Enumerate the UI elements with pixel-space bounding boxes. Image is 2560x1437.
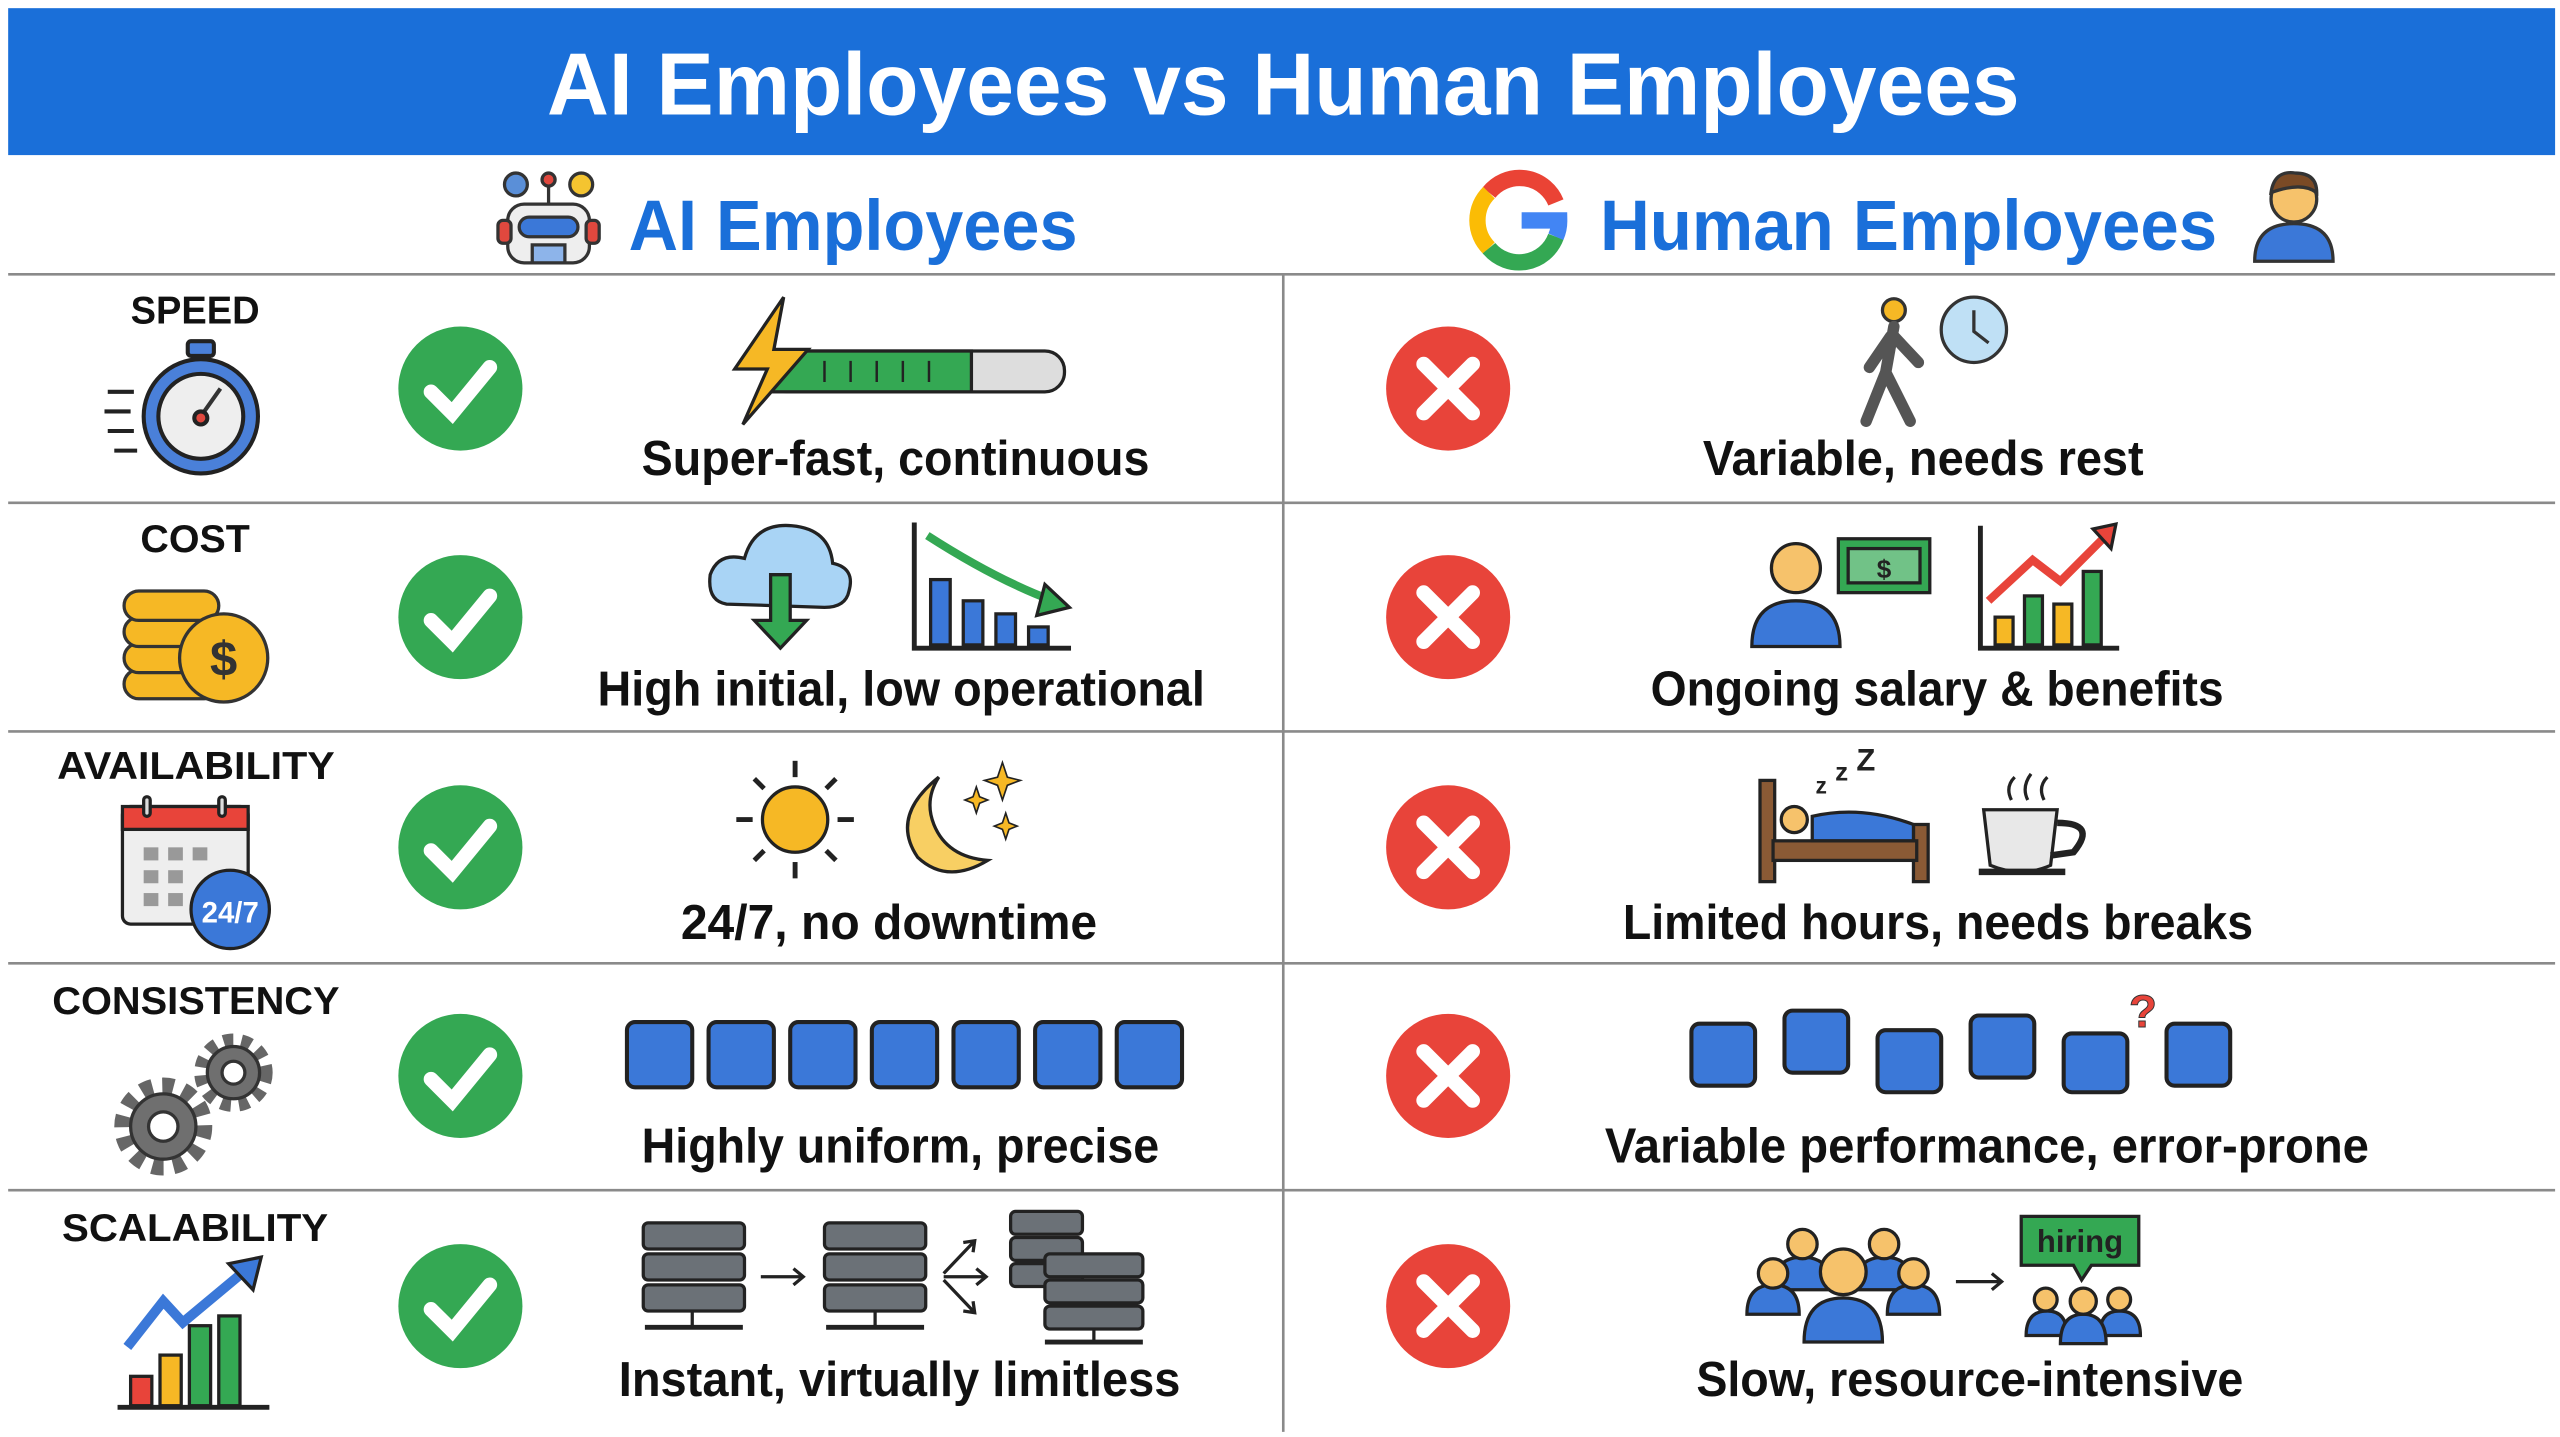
illustration: cloud and falling chart <box>710 522 1071 648</box>
row: CONSISTENCY <box>52 980 2369 1173</box>
icon: calendar 24/7: 24/7 <box>202 896 259 929</box>
check <box>398 1244 522 1368</box>
row: CONSISTENCY: Variable performance, error-prone <box>1605 1119 2369 1173</box>
illustration: sun and moon <box>736 761 1020 878</box>
illustration: uniform blocks <box>627 1022 1182 1087</box>
illustration: bolt and bar <box>735 297 1064 424</box>
column header: AI Employees: AI Employees <box>629 186 1078 266</box>
icon: robot <box>498 173 599 263</box>
label: SCALABILITY: SCALABILITY <box>62 1207 328 1250</box>
icon: gears <box>122 1040 266 1167</box>
label: AVAILABILITY: AVAILABILITY <box>57 745 335 788</box>
icon: person <box>2255 173 2333 261</box>
illustration: servers <box>643 1211 1143 1342</box>
icon: coins <box>124 591 268 702</box>
icon: coins: $ <box>210 633 237 687</box>
row: AVAILABILITY: Limited hours, needs breaks <box>1623 896 2253 950</box>
illustration: bed and coffee: z <box>1835 756 1848 786</box>
illustration: walker and clock <box>1866 297 2007 421</box>
illustration: salary and rising chart <box>1752 524 2119 648</box>
check <box>398 785 522 909</box>
row: SPEED <box>104 289 2144 486</box>
illustration: salary and rising chart: $ <box>1877 554 1892 584</box>
cross <box>1386 555 1510 679</box>
row: SCALABILITY <box>62 1207 2243 1407</box>
row: COST <box>124 518 2224 716</box>
illustration: variable blocks <box>1691 986 2230 1092</box>
column header: Human Employees: Human Employees <box>1600 186 2217 266</box>
illustration: team and hiring: hiring <box>2037 1224 2123 1259</box>
row: SCALABILITY: Slow, resource-intensive <box>1696 1353 2243 1407</box>
label: CONSISTENCY: CONSISTENCY <box>52 980 340 1023</box>
check <box>398 1014 522 1138</box>
row: AVAILABILITY <box>57 743 2253 950</box>
title banner: AI Employees vs Human Employees <box>547 34 2020 133</box>
illustration: bed and coffee: Z <box>1856 743 1875 778</box>
illustration: bed and coffee: z <box>1816 772 1827 798</box>
row: AVAILABILITY: 24/7, no downtime <box>681 896 1097 950</box>
row: CONSISTENCY: Highly uniform, precise <box>642 1119 1159 1173</box>
icon: stopwatch <box>104 341 258 473</box>
icon: growth chart <box>118 1257 269 1407</box>
check <box>398 555 522 679</box>
cross <box>1386 1014 1510 1138</box>
title banner <box>8 8 2555 155</box>
cross <box>1386 785 1510 909</box>
cross <box>1386 327 1510 451</box>
label: COST: COST <box>140 518 250 561</box>
icon: G logo <box>1477 178 1559 262</box>
illustration: variable blocks: ? <box>2129 986 2157 1037</box>
row: COST: High initial, low operational <box>598 662 1205 716</box>
column header: AI Employees <box>498 173 1078 266</box>
illustration: bed and coffee <box>1760 743 2083 882</box>
row: SCALABILITY: Instant, virtually limitless <box>619 1353 1180 1407</box>
column header: Human Employees <box>1477 173 2333 266</box>
check <box>398 327 522 451</box>
cross <box>1386 1244 1510 1368</box>
label: SPEED: SPEED <box>131 289 260 332</box>
row: SPEED: Variable, needs rest <box>1703 432 2144 486</box>
icon: calendar 24/7 <box>122 797 269 949</box>
row: COST: Ongoing salary & benefits <box>1651 662 2224 716</box>
row: SPEED: Super-fast, continuous <box>642 432 1149 486</box>
illustration: team and hiring <box>1747 1216 2140 1344</box>
